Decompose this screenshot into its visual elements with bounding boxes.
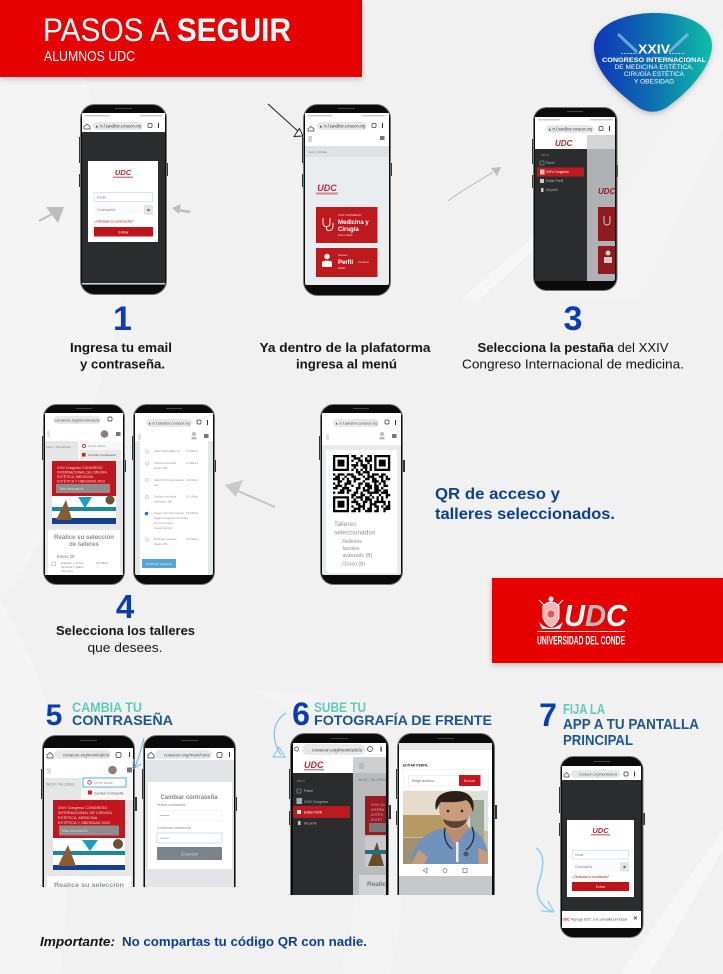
step number 3: 3 bbox=[564, 300, 582, 338]
step 2 caption bbox=[260, 341, 432, 372]
sidebar menu: MENÚ bbox=[541, 152, 549, 157]
phone 3: sidebar: ▲ m.f.sandbox.conacon.org bbox=[548, 126, 593, 132]
congress badge: CONGRESO INTERNACIONAL bbox=[602, 57, 706, 64]
step number 1: 1 bbox=[113, 300, 132, 338]
step 6 heading: SUBE TU bbox=[314, 699, 366, 715]
phone 7: add to home screen: conacon.org/moni/udc/a bbox=[579, 772, 618, 776]
congress badge: DE MEDICINA ESTÉTICA, bbox=[614, 64, 694, 71]
banner: ESTÉTICA, MEDICINA bbox=[57, 474, 94, 479]
login card: UDC bbox=[115, 168, 132, 177]
phone 5a: dropdown bbox=[41, 735, 137, 887]
step 7 heading: APP A TU PANTALLA bbox=[563, 717, 699, 733]
congress badge: XXIV bbox=[638, 42, 670, 56]
workshop list: 14:00Hrs bbox=[186, 537, 199, 541]
card: medicina: Enero 2022 bbox=[338, 233, 353, 237]
file input: Elegir archivo... bbox=[412, 779, 437, 783]
sidebar menu bbox=[535, 149, 587, 281]
phone 1: login bbox=[79, 104, 168, 294]
login card: Contraseña bbox=[575, 865, 592, 869]
step 2 caption: ingresa al menú bbox=[296, 358, 397, 372]
step 6 heading: FOTOGRAFÍA DE FRENTE bbox=[314, 712, 492, 728]
phone 4b: selection bbox=[132, 404, 216, 584]
phone 6a: edit profile menu: ESTÉTI bbox=[371, 812, 383, 817]
install banner: UDC bbox=[562, 918, 570, 922]
card: perfil bbox=[316, 248, 378, 277]
card: medicina: XXIV CONGRESO bbox=[338, 213, 362, 217]
phone 4a: talleres: Venecia) bbox=[61, 569, 73, 573]
phone 5a: dropdown: conacon.org/moni/udc/a bbox=[63, 752, 109, 758]
profile photo bbox=[403, 791, 488, 864]
sidebar menu: Mi perfil bbox=[546, 188, 558, 192]
phone 2: main menu bbox=[302, 104, 392, 296]
step 1 caption: y contraseña. bbox=[80, 358, 165, 372]
arrow to phone 3 bbox=[448, 167, 501, 201]
phone 6b: upload photo: EDITAR PERFIL bbox=[403, 764, 428, 768]
install banner bbox=[562, 911, 641, 928]
step number 6: 6 bbox=[292, 696, 310, 732]
card: perfil: Editar bbox=[338, 266, 345, 270]
card: perfil: Perfil bbox=[338, 260, 353, 266]
step 7 heading: PRINCIPAL bbox=[563, 733, 633, 749]
congress badge bbox=[594, 13, 712, 112]
phone 4a: talleres: conacon.org/moni/udc/a bbox=[55, 418, 100, 422]
sidebar: Panel bbox=[304, 789, 313, 793]
QR code bbox=[333, 455, 390, 512]
banner bbox=[52, 461, 116, 524]
workshop list: Hilos PDO Avanzados bbox=[154, 478, 184, 482]
UDC logo block: UNIVERSIDAD DEL CONDE bbox=[537, 636, 625, 648]
step 3 caption: Selecciona la pestaña del XXIV bbox=[478, 341, 669, 355]
password card: Nueva contraseña bbox=[157, 803, 185, 807]
QR caption: talleres seleccionados. bbox=[435, 506, 615, 523]
crest bbox=[539, 596, 563, 629]
phone 4a: talleres: funciona? (Salón bbox=[61, 565, 84, 569]
selected workshops: seleccionados bbox=[334, 530, 376, 536]
congress badge: CIRUGÍA ESTÉTICA bbox=[624, 71, 685, 78]
confirm button: Confirmar selección bbox=[146, 562, 173, 566]
phone 6a: edit profile menu: Realic bbox=[367, 881, 387, 888]
install banner: Agrega UDC a la pantalla principal bbox=[571, 918, 627, 922]
password card: Confirmar contraseña bbox=[157, 826, 191, 830]
phone 5a: dropdown: INICIO / TALLERES bbox=[46, 782, 74, 786]
banner bbox=[53, 800, 125, 870]
step 1 caption bbox=[70, 341, 172, 372]
step number 5: 5 bbox=[46, 699, 62, 732]
step number 7: 7 bbox=[539, 697, 557, 733]
workshop list: 11:30Hrs bbox=[186, 461, 198, 465]
login card: ¿Olvidaste tu contraseña? bbox=[94, 220, 134, 224]
login card: Entrar bbox=[596, 885, 606, 889]
login card: Contraseña bbox=[97, 208, 115, 212]
phone 3: sidebar: UDC bbox=[555, 139, 573, 148]
workshop list: avanzado (B) bbox=[154, 500, 172, 504]
arrow: right of phone 1 bbox=[172, 204, 190, 214]
step 4 caption: Selecciona los talleres bbox=[56, 624, 195, 638]
workshop list: vaginal (rejuvenecimiento bbox=[154, 516, 188, 520]
sidebar: MENÚ bbox=[297, 778, 305, 783]
workshop list: (A) bbox=[154, 483, 158, 487]
arrow: blue to menu bbox=[133, 738, 144, 769]
phone 5b: change password bbox=[142, 735, 237, 887]
phone 4a: talleres: de talleres bbox=[69, 542, 100, 548]
banner: INTERNACIONAL DE CIRUGÍA bbox=[58, 811, 112, 815]
phone 6a: edit profile menu: XXIV Co bbox=[371, 803, 384, 807]
QR caption: QR de acceso y bbox=[435, 486, 560, 503]
header banner bbox=[0, 0, 362, 77]
banner: XXIV Congreso CONGRESO bbox=[57, 466, 103, 470]
password card: Cambiar contraseña bbox=[160, 794, 218, 801]
arrow: blue wavy bbox=[536, 848, 554, 912]
login card bbox=[88, 161, 158, 242]
subtitle: ALUMNOS UDC bbox=[44, 49, 135, 65]
workshop list: Rellenos faciales bbox=[154, 537, 177, 541]
phone: QR code bbox=[319, 404, 405, 584]
selected workshops: avanzado (B) bbox=[342, 553, 373, 559]
step number 4: 4 bbox=[116, 588, 135, 625]
dropdown: Cerrar sesión bbox=[88, 444, 106, 448]
selected workshops: . Rellenos bbox=[340, 539, 362, 545]
arrow: left of phone 1 bbox=[39, 207, 64, 223]
step 7 heading bbox=[563, 702, 699, 749]
step 1 caption: Ingresa tu email bbox=[70, 341, 172, 355]
card: perfil: Usuario bbox=[338, 253, 348, 257]
phone 7: add to home screen bbox=[559, 756, 645, 938]
password card: ••••••••• bbox=[160, 836, 169, 840]
login card: UDC bbox=[592, 826, 609, 835]
sidebar menu: XXIV Congreso bbox=[546, 170, 569, 174]
selected workshops: . Ozono (B) bbox=[340, 562, 365, 568]
phone 6a: edit profile menu bbox=[289, 733, 391, 895]
step 5 heading: CONTRASEÑA bbox=[72, 711, 173, 728]
workshop list: básico (B) bbox=[154, 466, 168, 470]
login card: Entrar bbox=[118, 230, 129, 234]
phone 4a: talleres bbox=[42, 404, 126, 584]
workshop list: Láser Co2 fraccionado bbox=[154, 511, 185, 515]
phone 6b: upload photo bbox=[396, 733, 497, 895]
phone 4a: talleres: Inicio / TALLERES bbox=[46, 445, 71, 449]
sidebar bbox=[293, 773, 353, 895]
phone 3: sidebar bbox=[532, 108, 618, 290]
step 3 caption: Congreso Internacional de medicina. bbox=[462, 358, 684, 372]
phone: QR code: ▲ m.f.sandbox.conacon.org bbox=[335, 420, 377, 426]
file input bbox=[408, 775, 480, 786]
phone 4a: talleres: Enero 29 bbox=[57, 554, 75, 559]
UDC logo block bbox=[492, 578, 723, 663]
selected workshops bbox=[334, 521, 376, 568]
sidebar: XXIV Congreso bbox=[304, 800, 328, 804]
banner: ESTÉTICA Y OBESIDAD 2022 bbox=[57, 478, 105, 484]
workshop list: 11:30Hrs bbox=[186, 449, 198, 453]
black arrow to menu bbox=[268, 104, 303, 136]
step 5 heading: CAMBIA TU bbox=[72, 699, 142, 715]
password card: ••••••••• bbox=[160, 814, 169, 818]
banner: XXIV Congreso CONGRESO bbox=[58, 806, 107, 810]
phone 5b: change password: conacon.org/moni/conc bbox=[164, 752, 211, 758]
phone 6a: edit profile menu: INTERN bbox=[371, 808, 384, 812]
sidebar menu: Panel bbox=[546, 161, 555, 165]
dropdown highlighted bbox=[81, 777, 133, 800]
login card bbox=[567, 820, 634, 897]
dropdown: Cambiar Contraseña bbox=[88, 453, 116, 457]
workshop list: femenina) (A) bbox=[154, 526, 172, 530]
phone 2: main menu: Inicio / PANEL bbox=[308, 150, 327, 154]
UDC logo block: UDC bbox=[564, 598, 628, 633]
workshop list: 14:00Hrs bbox=[186, 511, 199, 515]
step 7 heading: FIJA LA bbox=[563, 702, 605, 718]
file input: Buscar bbox=[464, 779, 476, 783]
card: perfil: Conacon bbox=[358, 260, 370, 264]
important note: Importante: bbox=[40, 934, 115, 949]
banner: ESTÉTICA, MEDICINA bbox=[58, 815, 98, 820]
workshop list: Vitec PDO(Salón A) bbox=[154, 449, 180, 453]
phone 6a: edit profile menu: UDC bbox=[304, 760, 324, 770]
step 5 heading bbox=[72, 699, 173, 728]
workshop list: 13:00Hrs bbox=[186, 494, 199, 498]
important note: No compartas tu código QR con nadie. bbox=[122, 934, 367, 949]
phone 1: login: ▲ m.f.sandbox.conacon.org bbox=[95, 124, 142, 128]
android nav bar bbox=[423, 868, 467, 873]
step 2 caption: Ya dentro de la plafatorma bbox=[260, 341, 432, 355]
card: medicina bbox=[316, 207, 378, 243]
phone 6a: edit profile menu: ESTÉT bbox=[371, 817, 383, 822]
step 4 caption: que desees. bbox=[88, 641, 162, 655]
sidebar: Mi perfil bbox=[304, 822, 316, 826]
phone 6a: edit profile menu: conacon.org/moni/udc/a bbox=[312, 748, 362, 754]
phone 6a: edit profile menu: INICIO / TALLERES bbox=[358, 778, 386, 782]
phone 2: main menu: ▲ m.f.sandbox.conacon.org bbox=[319, 124, 366, 128]
step 3 caption bbox=[462, 341, 684, 372]
workshop list: 13:00Hrs bbox=[186, 478, 199, 482]
workshop list: básico (B) bbox=[154, 542, 168, 546]
dropdown highlighted: Cambiar Contraseña bbox=[94, 792, 124, 796]
banner: ESTÉTICA Y OBESIDAD 2022 bbox=[58, 820, 110, 825]
sidebar: Editar Perfil bbox=[304, 810, 322, 814]
arrow to selection phone bbox=[225, 480, 275, 507]
card: medicina: Medicina y bbox=[338, 220, 369, 226]
dropdown highlighted: Cerrar sesión bbox=[94, 781, 113, 785]
banner: Más información bbox=[62, 829, 88, 833]
password card: Guardar bbox=[181, 852, 199, 858]
phone 5a: dropdown: Realice su selección bbox=[54, 882, 124, 889]
workshop list: Toxina botulínica bbox=[154, 461, 177, 465]
phone 4b: selection: ▲ m.f.sandbox.conacon.org bbox=[148, 420, 190, 426]
QR caption bbox=[435, 486, 615, 523]
arrow: blue curved bbox=[273, 713, 286, 757]
phone 4a: talleres: 14:30Hrs bbox=[96, 561, 109, 565]
confirm button bbox=[142, 559, 176, 568]
banner: INTERNACIONAL DE CIRUGÍA bbox=[57, 470, 107, 474]
workshop list bbox=[145, 449, 199, 546]
phone 2: main menu: UDC bbox=[317, 183, 337, 193]
sidebar menu: Editar Perfil bbox=[546, 179, 563, 183]
step 6 heading bbox=[314, 699, 492, 728]
selected workshops: Talleres bbox=[334, 521, 357, 528]
login card: Email bbox=[575, 853, 584, 857]
dropdown bbox=[78, 441, 123, 460]
title: PASOS A SEGUIR bbox=[43, 12, 291, 48]
selected workshops: faciales bbox=[342, 546, 360, 552]
password card bbox=[148, 782, 232, 869]
banner: Más información bbox=[60, 487, 84, 491]
card: medicina: Cirugía bbox=[338, 227, 359, 233]
login card: Email bbox=[97, 196, 106, 200]
step 4 caption bbox=[56, 624, 195, 655]
workshop list: Toxina botulínica bbox=[154, 494, 177, 498]
congress badge: Y OBESIDAD bbox=[634, 78, 675, 86]
phone 4a: talleres: Realice su selección bbox=[54, 535, 114, 541]
workshop list: en zona íntima bbox=[154, 521, 174, 525]
login card: ¿Olvidaste tu contraseña? bbox=[572, 875, 609, 879]
phone 3: sidebar: UDC bbox=[598, 187, 616, 196]
phone 4a: talleres: Dialcide: ¿Cómo bbox=[61, 561, 84, 565]
